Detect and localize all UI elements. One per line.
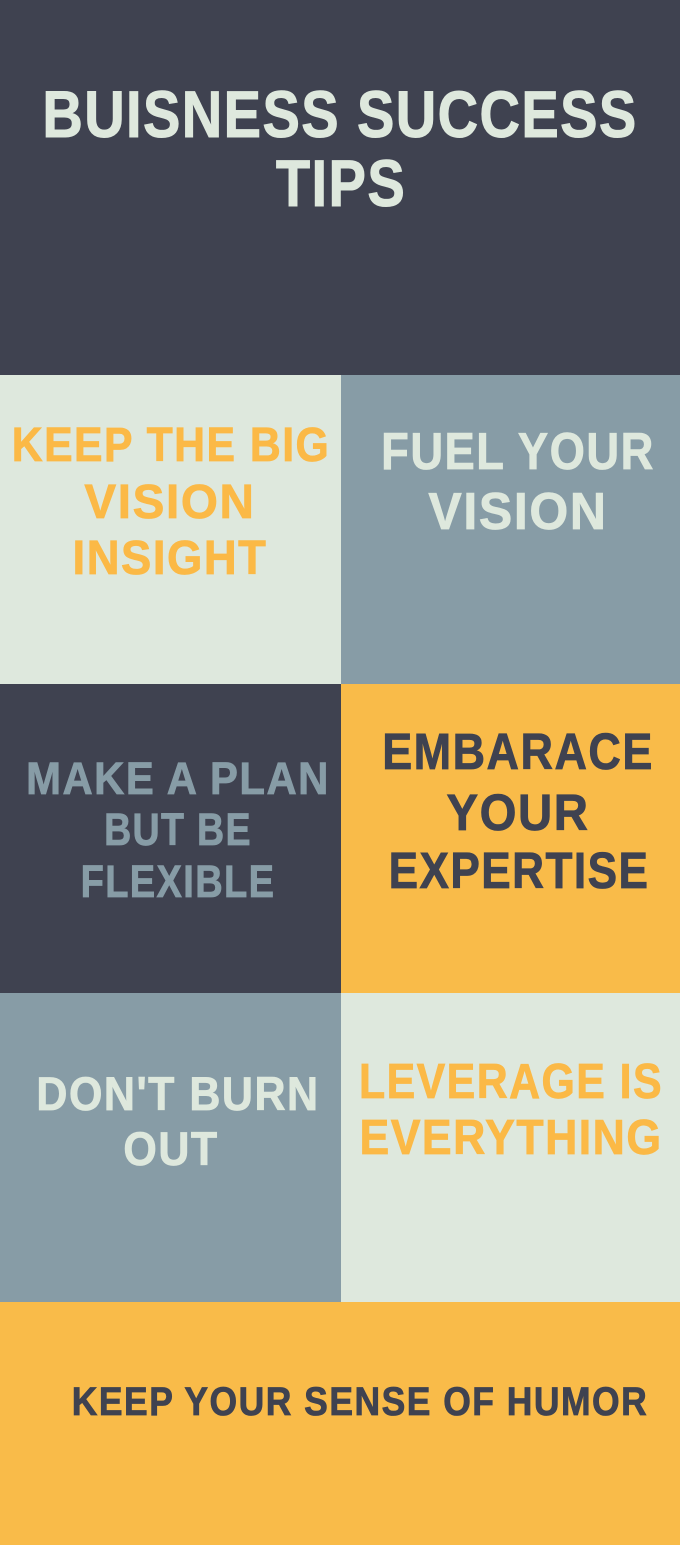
title: TIPS [275, 146, 406, 220]
tip text: EVERYTHING [359, 1111, 663, 1165]
panel: embarace your expertise [340, 684, 680, 992]
panel: keep the big vision insight [0, 374, 341, 684]
tip text: OUT [123, 1123, 218, 1176]
tip text: KEEP YOUR SENSE OF HUMOR [72, 1380, 648, 1424]
tip text: VISION [428, 483, 607, 541]
panel: make a plan but be flexible [0, 684, 340, 992]
tip text [381, 422, 655, 541]
tip text [36, 1068, 319, 1176]
panel: fuel your vision [341, 374, 680, 684]
panel: leverage is everything [340, 992, 680, 1302]
tip text: VISION [84, 474, 256, 528]
tip text: BUT BE [104, 804, 252, 855]
tip text: MAKE A PLAN [26, 752, 329, 804]
tip text: INSIGHT [73, 530, 267, 584]
tip text: LEVERAGE IS [359, 1055, 663, 1109]
tip text: KEEP THE BIG [11, 418, 330, 472]
tip text [26, 752, 329, 907]
title [42, 77, 638, 220]
tip text: EMBARACE [382, 723, 654, 780]
tip text: DON'T BURN [36, 1068, 319, 1121]
tip text: EXPERTISE [388, 842, 649, 899]
panel: title header [0, 0, 680, 374]
tip text: FLEXIBLE [81, 856, 275, 907]
tip text [359, 1055, 663, 1165]
panel: don't burn out [0, 992, 340, 1302]
panel: keep your sense of humor [0, 1302, 680, 1545]
tip text [382, 723, 654, 899]
tip text: YOUR [446, 784, 589, 840]
tip text: FUEL YOUR [381, 422, 655, 480]
tip text [11, 418, 330, 584]
title: BUISNESS SUCCESS [42, 77, 638, 151]
